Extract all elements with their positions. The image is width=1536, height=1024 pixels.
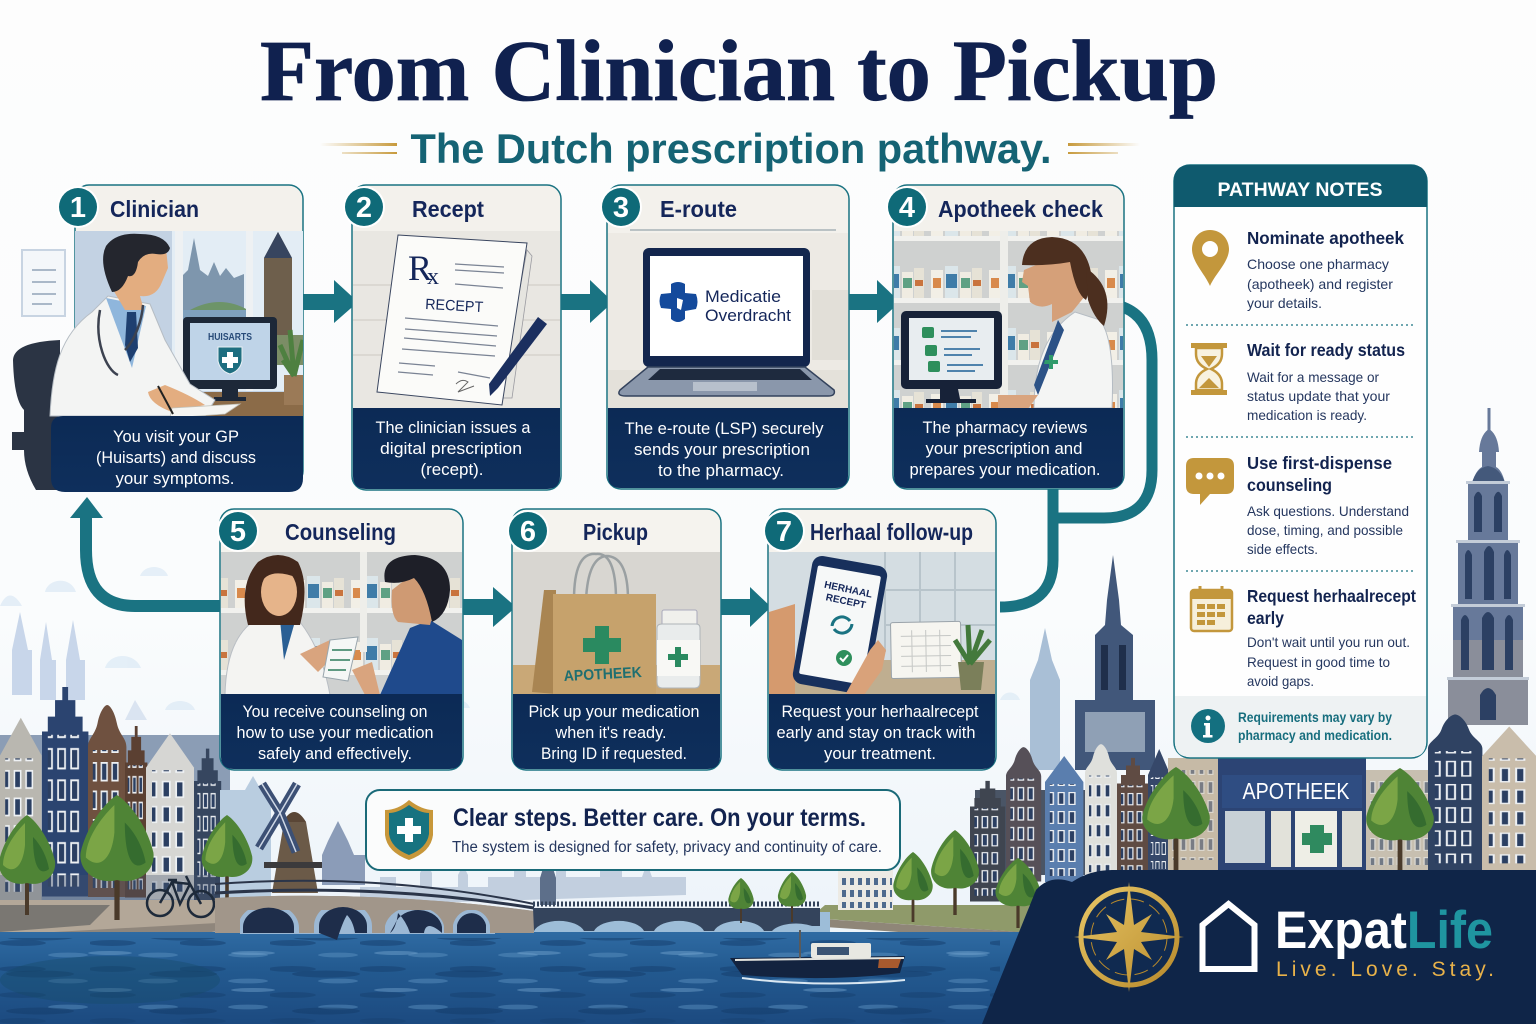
info bar: Requirements may vary by (1238, 710, 1392, 725)
badge 3: 3 (613, 192, 629, 224)
right canal houses (970, 744, 1220, 902)
arrow: 4 down connector (1000, 306, 1152, 607)
panel: step 1 clinician (12, 185, 304, 492)
heading: Clinician (110, 196, 199, 222)
icon: hourglass (1191, 343, 1227, 395)
caption (769, 694, 995, 769)
illustration: phone and calendar (769, 552, 995, 696)
caption text: your treatment. (824, 744, 936, 763)
card frame (512, 509, 721, 770)
illustration: phone and calendar: HERHAAL (823, 580, 873, 601)
chair (12, 340, 60, 490)
caption text: digital prescription (380, 439, 522, 458)
icon: shield (385, 800, 433, 860)
caption text: safely and effectively. (258, 744, 412, 763)
note text (1247, 340, 1405, 423)
caption (353, 408, 560, 489)
caption text: to the pharmacy. (658, 461, 784, 480)
water canal (0, 912, 1536, 1024)
panel: clear steps banner (366, 790, 900, 870)
panel: step 4 apotheek check (886, 185, 1124, 489)
note text: Ask questions. Understand (1247, 503, 1409, 519)
badge 4: 4 (899, 192, 915, 224)
illustration: laptop (608, 233, 848, 409)
right bank quay (807, 905, 1030, 940)
note text: Choose one pharmacy (1247, 256, 1389, 272)
arrow: 2 to 3 (561, 280, 613, 323)
badge 2: 2 (356, 192, 372, 224)
panel: step 3 e-route (600, 185, 849, 489)
note text: medication is ready. (1247, 407, 1367, 423)
brand tagline: Live. Love. Stay. (1276, 958, 1494, 981)
note text: avoid gaps. (1247, 673, 1314, 689)
logo text: Medicatie (705, 287, 781, 306)
card frame (893, 185, 1124, 489)
monitor: huisarts (183, 317, 277, 401)
wall poster (22, 250, 65, 316)
card frame (75, 185, 303, 485)
note text: Request in good time to (1247, 654, 1390, 670)
panel: step 5 counseling (217, 509, 463, 770)
caption text: Pick up your medication (528, 702, 700, 721)
logo text (705, 287, 791, 325)
badge 5 (217, 510, 259, 552)
heading: Herhaal follow-up (810, 519, 973, 545)
note text: status update that your (1247, 388, 1390, 404)
apotheek storefront (1218, 750, 1366, 870)
logo text: Overdracht (705, 306, 791, 325)
card frame (768, 509, 996, 770)
note text: counseling (1247, 475, 1332, 495)
caption text (910, 418, 1100, 479)
note text: early (1247, 608, 1284, 628)
note text: Nominate apotheek (1247, 228, 1404, 248)
note text (1247, 453, 1409, 557)
caption text: The clinician issues a (376, 418, 531, 437)
note: request herhaalrecept (1191, 586, 1416, 689)
arrow: 1 to 2 (303, 280, 358, 323)
illustration: pharmacist at monitor (894, 231, 1123, 409)
monitor: huisarts: HUISARTS (208, 332, 252, 343)
note text: side effects. (1247, 541, 1318, 557)
badge 2 (343, 186, 385, 228)
skyline: right pale church (1030, 628, 1060, 770)
notes header: PATHWAY NOTES (1218, 179, 1382, 201)
apotheek storefront: APOTHEEK (1242, 778, 1350, 804)
note text: Don't wait until you run out. (1247, 634, 1410, 650)
caption (51, 416, 303, 492)
caption text (236, 702, 434, 763)
caption (221, 694, 462, 769)
trees left (0, 795, 252, 920)
icon: speech bubble (1186, 458, 1234, 505)
note text: Request herhaalrecept (1247, 586, 1416, 606)
note text: Wait for a message or (1247, 369, 1379, 385)
heading: Pickup (583, 519, 648, 545)
illustration: paper prescription: R (408, 248, 432, 288)
card frame (352, 185, 561, 490)
caption text (776, 702, 979, 763)
quay left (0, 900, 235, 945)
caption text: prepares your medication. (910, 460, 1100, 479)
info bar: pharmacy and medication. (1238, 728, 1392, 743)
skyline: dark church tower (1075, 555, 1155, 770)
caption (513, 694, 720, 769)
info bar (1175, 696, 1426, 757)
logo panel (982, 870, 1536, 1024)
caption text (624, 419, 824, 480)
icon: bicycle (147, 876, 214, 917)
badge 6: 6 (520, 516, 536, 548)
church tower right (1447, 408, 1529, 725)
heading: Counseling (285, 519, 396, 545)
banner subtext: The system is designed for safety, privacy and continuity of care. (452, 839, 882, 856)
caption text: when it's ready. (555, 723, 666, 742)
brand wordmark: ExpatLife (1275, 901, 1493, 960)
subtitle: The Dutch prescription pathway. (410, 125, 1052, 172)
caption text (528, 702, 700, 763)
notes header (1174, 165, 1427, 207)
arrow: 3 to 4 (849, 280, 900, 323)
card frame (607, 185, 849, 489)
illustration: bag and bottle: APOTHEEK (563, 664, 642, 685)
arrow: 5 to 1 (70, 497, 222, 606)
trees lower right (728, 870, 893, 923)
trees by storefront (893, 767, 1434, 928)
skyline: pale towers left (12, 612, 147, 720)
caption text (376, 418, 531, 479)
caption text (96, 427, 256, 488)
panel: step 6 pickup (507, 509, 721, 770)
caption (608, 408, 848, 488)
badge 1: 1 (70, 192, 86, 224)
caption text: (Huisarts) and discuss (96, 448, 256, 467)
background clouds (0, 567, 1026, 710)
caption text: (recept). (420, 460, 484, 479)
caption text: Bring ID if requested. (541, 744, 687, 763)
note: first-dispense counseling (1186, 453, 1409, 557)
icon: calendar (1191, 586, 1232, 631)
skyline: distant city (322, 821, 686, 905)
badge 7 (763, 510, 805, 552)
far right canal houses (1366, 714, 1536, 871)
panel: step 7 herhaal follow-up (763, 509, 996, 770)
banner heading: Clear steps. Better care. On your terms. (453, 804, 866, 832)
illustration: counseling (221, 552, 462, 695)
clinician figure (50, 234, 240, 418)
illustration: phone and calendar: RECEPT (825, 592, 867, 611)
caption text: You visit your GP (113, 427, 239, 446)
note text: Use first-dispense (1247, 453, 1392, 473)
icon: boat (730, 930, 905, 984)
illustration: paper prescription: x (427, 264, 439, 290)
badge 7: 7 (776, 516, 792, 548)
illustration: bag and bottle (513, 552, 720, 695)
icon: location pin (1192, 230, 1229, 286)
title: From Clinician to Pickup (260, 22, 1218, 119)
badge 6 (507, 510, 549, 552)
arrow: 5 to 6 (463, 587, 516, 627)
note text: Wait for ready status (1247, 340, 1405, 360)
caption text: The e-route (LSP) securely (624, 419, 824, 438)
caption (894, 408, 1123, 488)
caption text: your prescription and (926, 439, 1082, 458)
heading: Recept (412, 196, 484, 222)
caption text: The pharmacy reviews (922, 418, 1088, 437)
illustration: paper prescription: RECEPT (425, 296, 484, 316)
heading: E-route (660, 196, 737, 222)
badge 1 (57, 186, 99, 228)
panel: pathway notes (1174, 165, 1427, 758)
second bridge (533, 904, 820, 931)
icon: compass (1074, 882, 1184, 992)
caption text: You receive counseling on (242, 702, 428, 721)
icon: house logo (1202, 904, 1254, 969)
stone bridge (215, 881, 534, 940)
note text (1247, 228, 1404, 311)
caption text: sends your prescription (634, 440, 810, 459)
caption text: Request your herhaalrecept (782, 702, 979, 721)
note: nominate apotheek (1192, 228, 1404, 311)
caption text: how to use your medication (236, 723, 434, 742)
badge 5: 5 (230, 516, 246, 548)
card frame (220, 509, 463, 770)
note text: dose, timing, and possible (1247, 522, 1403, 538)
icon: windmill (259, 784, 322, 893)
badge 3 (600, 186, 642, 228)
badge 4 (886, 186, 928, 228)
note: wait for ready status (1191, 340, 1405, 423)
skyline: left canal houses (0, 687, 271, 901)
caption text: your symptoms. (116, 469, 234, 488)
illustration: paper prescription (353, 231, 560, 409)
illustration: clinician office (75, 231, 304, 416)
note text: (apotheek) and register (1247, 276, 1393, 292)
note text: your details. (1247, 295, 1322, 311)
heading: Apotheek check (938, 196, 1103, 222)
arrow: 6 to 7 (721, 587, 771, 627)
panel: step 2 recept (343, 185, 561, 490)
caption text: early and stay on track with (776, 723, 976, 742)
note text (1247, 586, 1416, 689)
